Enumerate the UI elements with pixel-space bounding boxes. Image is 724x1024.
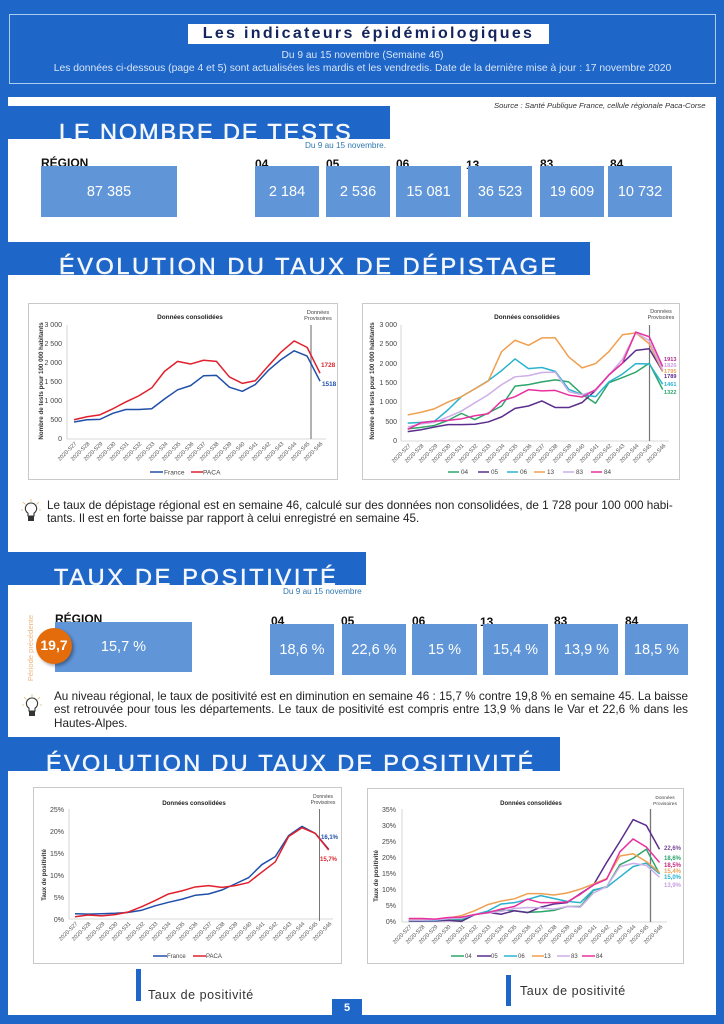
end labels: 16,1% [321,835,339,841]
y axis ticks: 0% [54,917,64,924]
dept 06: 06 [412,614,425,628]
caption text: Taux de positivité [148,988,254,1002]
y axis ticks: 5% [54,895,64,902]
x axis ticks: 2020-S38 [538,443,559,465]
dept 05: 05 [326,157,339,171]
provisional note [648,309,675,321]
value region [55,622,192,672]
x axis ticks: 2020-S31 [445,924,466,946]
x axis ticks: 2020-S43 [603,924,624,946]
dept 83: 19 609 [550,184,594,200]
legend: 83 [576,469,584,476]
x axis ticks: 2020-S39 [550,924,571,946]
text: positivity comment: Au niveau régional, le taux de positivité est en diminution en semaine 46 : 15,7 % contre 19,8 % en semaine 45. La baisse est retrouvée pour tous les départements. Le taux de positivité est compris entre 13,9 % dans le Var et 22,6 % dans les Hautes-Alpes. [54,690,688,730]
x axis ticks: 2020-S32 [458,443,479,465]
lines [75,826,329,917]
x axis ticks: 2020-S36 [178,921,199,943]
x axis ticks: 2020-S29 [83,441,104,463]
x axis ticks: 2020-S32 [458,924,479,946]
dept 84: 10 732 [618,184,662,200]
legend: 04 [461,469,469,476]
y axis ticks [44,322,62,443]
y axis ticks: 2 000 [379,361,397,368]
chart title: Données consolidées [500,801,563,807]
x axis ticks: 2020-S33 [135,441,156,463]
x axis ticks [57,441,324,463]
provisional note: Provisoires [653,801,677,807]
x axis ticks: 2020-S39 [212,441,233,463]
label region: RÉGION [41,156,88,170]
y axis title: Nombre de tests pour 100 000 habitants [38,322,45,440]
x axis ticks: 2020-S37 [525,443,546,465]
x axis ticks: 2020-S44 [619,443,640,465]
source: Source : Santé Publique France, cellule régionale Paca-Corse [494,101,706,110]
previous value badge: 19,7 [40,637,68,653]
x axis ticks: 2020-S44 [616,924,637,946]
end labels: 1826 [664,363,676,369]
y axis ticks: 15% [382,871,396,878]
y axis ticks: 2 000 [44,360,62,367]
caption text: Taux de positivité [520,984,626,998]
heading: évolution du taux de dépistage [8,242,590,275]
x axis ticks: 2020-S39 [218,921,239,943]
x axis ticks: 2020-S41 [577,924,598,946]
dept 04 [270,614,334,675]
y axis ticks: 20% [382,855,396,862]
dept 05: 22,6 % [351,642,397,658]
provisional note: Données [650,309,672,315]
provisional note: Données [313,794,334,800]
dept 05 [326,157,390,217]
dept 84 [625,614,688,675]
provisional note: Provisoires [311,800,336,806]
end labels: 18,5% [664,863,682,869]
lines [408,332,663,432]
caption bar [136,969,141,1001]
y axis ticks: 25% [382,839,396,846]
x axis ticks: 2020-S28 [404,443,425,465]
caption left [136,969,254,1002]
x axis ticks: 2020-S27 [392,924,413,946]
heading: évolution du taux de positivité [8,737,560,771]
dept 84: 18,5 % [634,642,679,658]
end labels: 1518 [322,381,337,388]
dept 13: 15,4 % [493,642,538,658]
y axis ticks [382,807,396,926]
legend: 04 [465,954,472,960]
x axis ticks: 2020-S40 [225,441,246,463]
date subtitle: Du 9 au 15 novembre (Semaine 46) [282,50,443,61]
legend: France [164,470,185,476]
dept 84: 84 [610,157,623,171]
x axis ticks: 2020-S33 [471,924,492,946]
x axis ticks: 2020-S34 [485,443,506,465]
end labels: 1728 [321,362,336,369]
x axis ticks: 2020-S32 [125,921,146,943]
y axis ticks: 1 000 [44,398,62,405]
x axis ticks: 2020-S36 [512,443,533,465]
provisional note [311,794,336,806]
y axis ticks [379,322,397,445]
dept 05: 2 536 [340,184,376,200]
x axis ticks: 2020-S33 [471,443,492,465]
update note: Les données ci-dessous (page 4 et 5) sont actualisées les mardis et les vendredis. Date de la dernière mise à jour : 17 novembre 2020 [54,63,671,74]
dept 83: 13,9 % [564,642,609,658]
x axis ticks: 2020-S29 [418,443,439,465]
x axis ticks: 2020-S29 [85,921,106,943]
x axis ticks: 2020-S28 [405,924,426,946]
text: dépistage comment [47,499,673,525]
dept 06 [396,157,461,217]
x axis ticks: 2020-S45 [629,924,650,946]
end labels [664,357,676,396]
x axis ticks: 2020-S38 [205,921,226,943]
y axis ticks: 500 [50,417,62,424]
legend: 06 [518,954,525,960]
legend: 06 [520,469,528,476]
x axis ticks: 2020-S41 [579,443,600,465]
dept 83: 83 [554,614,567,628]
chart: dépistage France PACA [28,303,338,480]
icon: light bulb [22,694,42,716]
y axis ticks: 3 000 [44,322,62,329]
dept 13: 36 523 [478,184,522,200]
end labels: 15,7% [320,857,338,863]
y axis ticks: 1 500 [379,380,397,387]
provisional note: Provisoires [648,315,675,321]
y axis ticks: 0% [386,919,396,926]
dept 04 [255,157,319,217]
end labels: 1322 [664,390,676,396]
legend: PACA [203,470,221,476]
dept 84 [608,157,672,217]
x axis ticks: 2020-S34 [484,924,505,946]
y axis title: Taux de positivité [373,850,380,902]
legend: France [167,954,186,960]
y axis title: Nombre de tests pour 100 000 habitants [369,322,376,440]
legend [451,954,603,960]
provisional note [304,310,332,322]
dept 83 [540,157,604,217]
x axis ticks: 2020-S35 [165,921,186,943]
panel: tests departments [255,157,672,217]
period note positivity: Du 9 au 15 novembre [283,587,362,596]
chart title: Données consolidées [494,314,560,321]
caption right [506,975,626,1006]
y axis ticks: 2 500 [44,341,62,348]
x axis ticks [391,443,667,465]
x axis ticks: 2020-S38 [199,441,220,463]
period note tests: Du 9 au 15 novembre. [305,141,386,150]
previous value badge [36,628,72,664]
chart: positivité France PACA [33,787,342,964]
page number: 5 [344,1002,350,1014]
value region: 87 385 [87,184,131,200]
x axis ticks: 2020-S37 [524,924,545,946]
end labels [320,835,339,863]
x axis ticks: 2020-S30 [98,921,119,943]
x axis ticks: 2020-S34 [148,441,169,463]
x axis ticks: 2020-S39 [552,443,573,465]
x axis ticks: 2020-S35 [497,924,518,946]
y axis title: Taux de positivité [41,849,48,901]
panel: positivity region [26,612,192,681]
header panel [9,14,716,84]
dept 83 [554,614,618,675]
y axis ticks: 1 000 [379,399,397,406]
icon: light bulb [21,499,41,521]
x axis ticks: 2020-S34 [151,921,172,943]
x axis ticks [58,921,333,943]
x axis ticks: 2020-S36 [174,441,195,463]
end labels: 22,6% [664,846,682,852]
end labels: 1913 [664,357,676,363]
x axis ticks: 2020-S30 [431,443,452,465]
x axis ticks: 2020-S38 [537,924,558,946]
lines [409,820,660,921]
y axis ticks: 3 000 [379,322,397,329]
x axis ticks: 2020-S46 [312,921,333,943]
lines [74,341,320,422]
x axis ticks: 2020-S46 [646,443,667,465]
x axis ticks: 2020-S30 [96,441,117,463]
y axis ticks: 10% [50,873,64,880]
legend: 83 [571,954,578,960]
dept 04: 18,6 % [279,642,325,658]
x axis ticks: 2020-S42 [251,441,272,463]
dept 06 [412,614,477,675]
y axis ticks: 2 500 [379,341,397,348]
dept 13: 13 [480,615,493,629]
x axis ticks: 2020-S44 [285,921,306,943]
x axis ticks: 2020-S32 [122,441,143,463]
dept 83: 83 [540,157,553,171]
end labels [321,362,337,388]
legend: 84 [596,954,603,960]
value region [41,166,177,217]
y axis ticks: 0 [393,438,397,445]
y axis ticks: 10% [382,887,396,894]
dept 05 [341,614,406,675]
legend: 05 [491,954,498,960]
dept 13: 13 [466,158,479,172]
legend: 13 [544,954,551,960]
x axis ticks: 2020-S43 [272,921,293,943]
x axis ticks: 2020-S44 [277,441,298,463]
y axis ticks: 0 [58,436,62,443]
x axis ticks: 2020-S29 [418,924,439,946]
end labels: 18,6% [664,856,682,862]
vertical label previous period: Période précédente [26,615,35,681]
x axis ticks: 2020-S46 [303,441,324,463]
y axis ticks: 25% [50,807,64,814]
y axis ticks: 5% [386,903,396,910]
x axis ticks: 2020-S42 [592,443,613,465]
x axis ticks: 2020-S45 [290,441,311,463]
dept 13 [466,158,532,217]
end labels: 1795 [664,369,676,375]
provisional note: Données [307,310,329,316]
x axis ticks: 2020-S31 [111,921,132,943]
dept 04: 2 184 [269,184,305,200]
heading: le nombre de tests [8,106,390,139]
x axis ticks: 2020-S42 [590,924,611,946]
title: Les indicateurs épidémiologiques [203,25,534,42]
x axis ticks: 2020-S40 [565,443,586,465]
text: dépistage comment: tants. Il est en forte baisse par rapport à celui enregistré en semaine 45. [47,512,419,525]
x axis ticks: 2020-S27 [58,921,79,943]
legend: PACA [206,954,222,960]
legend [150,470,221,476]
caption bar [506,975,511,1006]
x axis ticks: 2020-S35 [161,441,182,463]
heading: taux de positivité [8,552,366,585]
x axis ticks: 2020-S46 [643,924,664,946]
x axis ticks: 2020-S28 [70,441,91,463]
legend: 13 [547,469,555,476]
end labels: 15,0% [664,875,682,881]
legend: 84 [604,469,612,476]
end labels: 1461 [664,382,676,388]
x axis ticks: 2020-S36 [511,924,532,946]
x axis ticks: 2020-S43 [264,441,285,463]
x axis ticks [392,924,664,946]
dept 84: 84 [625,614,638,628]
page number [332,999,362,1015]
dept 04: 04 [271,614,284,628]
provisional note [653,795,677,807]
end labels [664,846,682,889]
text: dépistage comment: Le taux de dépistage régional est en semaine 46, calculé sur des données non consolidées, de 1 728 pour 100 000 habi- [47,499,673,512]
provisional note: Données [655,795,675,801]
x axis ticks: 2020-S40 [232,921,253,943]
end labels: 1789 [664,374,676,380]
dept 13 [480,615,548,675]
x axis ticks: 2020-S41 [245,921,266,943]
y axis ticks [50,807,64,924]
chart title: Données consolidées [162,800,226,807]
value region: 15,7 % [101,639,146,655]
x axis ticks: 2020-S31 [444,443,465,465]
x axis ticks: 2020-S37 [186,441,207,463]
end labels: 13,9% [664,883,682,889]
dept 04: 04 [255,157,268,171]
x axis ticks: 2020-S33 [138,921,159,943]
chart: dépistage départements [362,303,680,480]
y axis ticks: 35% [382,807,396,814]
x axis ticks: 2020-S42 [258,921,279,943]
dept 05: 05 [341,614,354,628]
dept 06: 15 081 [406,184,451,200]
legend [448,469,612,476]
y axis ticks: 15% [50,851,64,858]
panel: positivity departments [270,614,688,675]
x axis ticks: 2020-S40 [563,924,584,946]
x axis ticks: 2020-S27 [57,441,78,463]
x axis ticks: 2020-S31 [109,441,130,463]
dept 06: 15 % [428,642,461,658]
legend [153,954,222,960]
x axis ticks: 2020-S43 [605,443,626,465]
label region: RÉGION [55,612,102,626]
x axis ticks: 2020-S28 [71,921,92,943]
x axis ticks: 2020-S30 [431,924,452,946]
dept 06: 06 [396,157,409,171]
panel: tests region [41,156,177,217]
y axis ticks: 20% [50,829,64,836]
x axis ticks: 2020-S45 [632,443,653,465]
y axis ticks: 1 500 [44,379,62,386]
x axis ticks: 2020-S27 [391,443,412,465]
provisional note: Provisoires [304,316,332,322]
y axis ticks: 30% [382,823,396,830]
x axis ticks: 2020-S37 [192,921,213,943]
end labels: 15,4% [664,869,682,875]
x axis ticks: 2020-S45 [298,921,319,943]
y axis ticks: 500 [385,419,397,426]
chart: positivité départements [367,788,684,964]
x axis ticks: 2020-S41 [238,441,259,463]
x axis ticks: 2020-S35 [498,443,519,465]
chart title: Données consolidées [157,314,223,321]
legend: 05 [491,469,499,476]
